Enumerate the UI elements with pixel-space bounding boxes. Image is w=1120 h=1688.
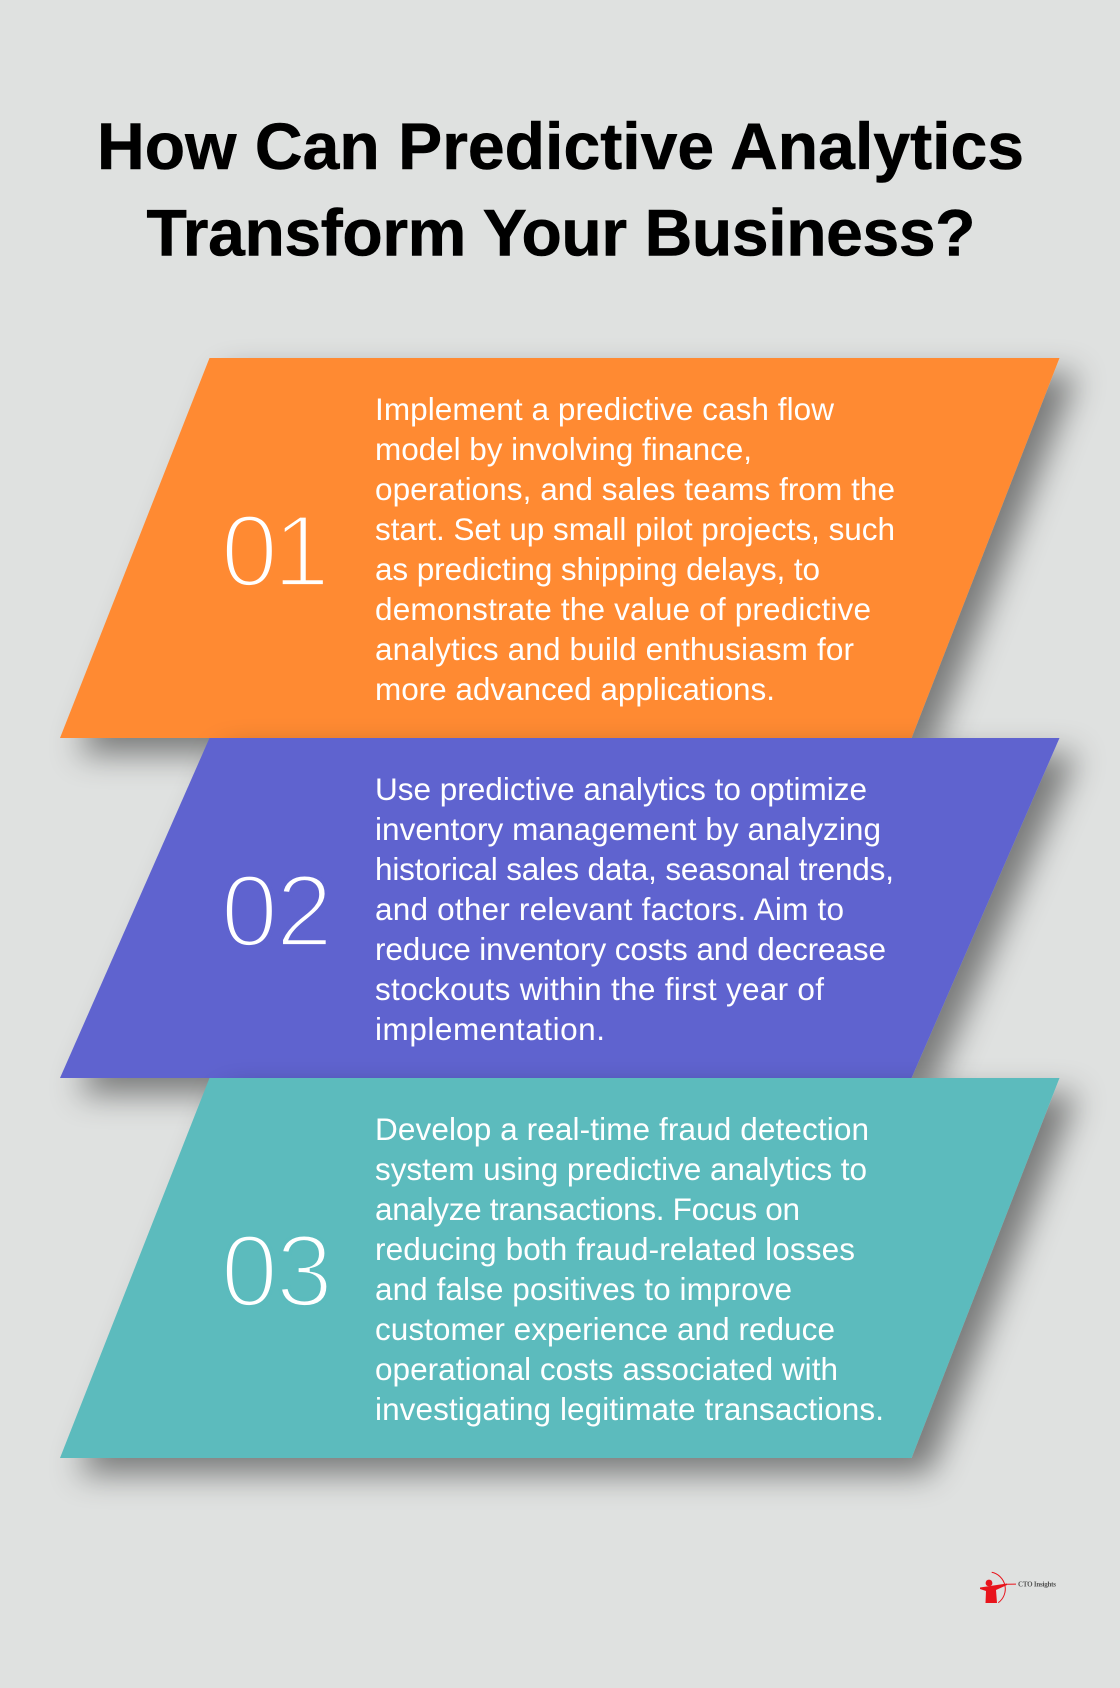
icon: red archer — [980, 1572, 1016, 1603]
number 02: 02 — [221, 854, 333, 968]
text block: step 02: stockouts within the first year of — [375, 971, 824, 1007]
panel: step 02 — [60, 738, 1060, 1078]
text block: step 03: operational costs associated with — [375, 1351, 838, 1387]
parallelogram: teal card — [60, 1078, 1060, 1458]
text block: step 03: Develop a real-time fraud detection — [375, 1111, 869, 1147]
title: How Can Predictive Analytics — [97, 109, 1024, 183]
text block: step 01: operations, and sales teams from the — [375, 471, 895, 507]
panel: step 03 — [60, 1078, 1060, 1458]
text block: step 01: Implement a predictive cash flow — [375, 391, 834, 427]
panel: step 01 — [60, 358, 1060, 738]
text block: step 02 — [375, 771, 894, 1047]
text block: step 01 — [375, 391, 895, 707]
text block: step 02: historical sales data, seasonal trends, — [375, 851, 894, 887]
text block: step 03 — [375, 1111, 884, 1427]
text block: step 02: inventory management by analyzing — [375, 811, 881, 847]
number 03: 03 — [221, 1214, 333, 1328]
title — [97, 109, 1024, 270]
logo: CTO Insights — [980, 1572, 1056, 1603]
text block: step 01: analytics and build enthusiasm for — [375, 631, 854, 667]
text block: step 02: Use predictive analytics to optimize — [375, 771, 867, 807]
text block: step 02: implementation. — [375, 1011, 605, 1047]
text block: step 03: investigating legitimate transactions. — [375, 1391, 884, 1427]
title: Transform Your Business? — [146, 196, 976, 270]
number 01: 01 — [221, 494, 330, 608]
text block: step 02: reduce inventory costs and decrease — [375, 931, 886, 967]
text block: step 02: and other relevant factors. Aim to — [375, 891, 844, 927]
text block: step 03: and false positives to improve — [375, 1271, 792, 1307]
text block: step 03: customer experience and reduce — [375, 1311, 835, 1347]
parallelogram: purple card — [60, 738, 1060, 1078]
text block: step 01: as predicting shipping delays, to — [375, 551, 820, 587]
text block: step 03: analyze transactions. Focus on — [375, 1191, 800, 1227]
logo wordmark: CTO Insights — [1018, 1580, 1056, 1588]
text block: step 01: more advanced applications. — [375, 671, 775, 707]
text block: step 03: system using predictive analytics to — [375, 1151, 867, 1187]
parallelogram: orange card — [60, 358, 1060, 738]
text block: step 03: reducing both fraud-related losses — [375, 1231, 855, 1267]
text block: step 01: start. Set up small pilot projects, such — [375, 511, 895, 547]
text block: step 01: model by involving finance, — [375, 431, 752, 467]
text block: step 01: demonstrate the value of predictive — [375, 591, 871, 627]
